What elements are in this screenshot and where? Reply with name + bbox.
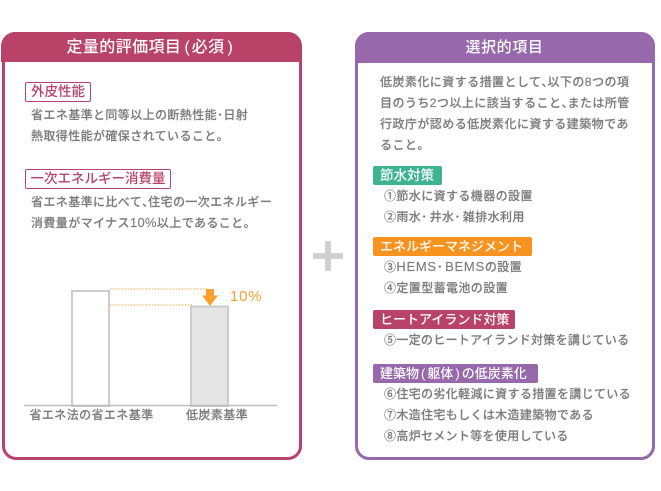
text: intro line 1: 低炭素化に資する措置として、以下の8つの項 [380,75,629,89]
text: primary energy line 2: 消費量がマイナス10%以上であること。 [31,215,256,230]
tag: water saving [373,166,442,185]
text: intro line 2: 目のうち2つ以上に該当すること、または所管 [380,96,630,110]
bar: low carbon standard [191,306,228,406]
item 5: ⑤一定のヒートアイランド対策を講じている [384,333,629,347]
panel frame: optional items [355,32,655,460]
icon: plus sign [313,241,343,271]
item 8: ⑧高炉セメント等を使用している [384,429,569,443]
heading: required items: 定量的評価項目(必須) [66,38,233,56]
label: energy conservation standard: 省エネ法の省エネ基準 [30,408,154,422]
item 3: ③HEMS･BEMSの設置 [384,259,522,274]
heading: required items [1,32,301,62]
item 1: ①節水に資する機器の設置 [384,189,533,203]
tag: heat island: ヒートアイランド対策 [380,312,509,327]
text: envelope performance line 2: 熱取得性能が確保されていること。 [31,129,229,143]
panel: optional items [355,32,655,460]
panel: required items [1,32,302,460]
icon: down arrow [202,289,218,306]
text: primary energy line 1: 省エネ基準に比べて、住宅の一次エネルギー [31,195,272,209]
item 7: ⑦木造住宅もしくは木造建築物である [384,408,594,422]
tag: building frame: 建築物(躯体)の低炭素化 [380,366,527,380]
tag: water saving: 節水対策 [380,168,434,183]
text: intro line 4: ること。 [380,138,430,152]
tag: energy management: エネルギーマネジメント [380,239,523,254]
item 6: ⑥住宅の劣化軽減に資する措置を講じている [384,387,631,401]
text: envelope performance line 1: 省エネ基準と同等以上の断熱性能･日射 [31,108,248,122]
bar chart [24,288,277,407]
bar: energy conservation standard [72,291,109,406]
text: intro line 3: 行政庁が認める低炭素化に資する建築物であ [380,117,629,131]
baseline [24,404,277,406]
label: low carbon standard: 低炭素基準 [186,408,248,422]
item 4: ④定置型蓄電池の設置 [384,281,508,295]
tag: envelope performance [25,82,91,102]
heading: optional items: 選択的項目 [465,38,544,56]
tag: envelope performance: 外皮性能 [31,84,85,99]
panel frame: required items [2,32,302,460]
label: 10%: 10% [230,288,262,305]
tag: primary energy consumption: 一次エネルギー消費量 [30,171,166,186]
tag: primary energy consumption [25,169,171,189]
dotted guide lines [110,289,207,305]
item 2: ②雨水･井水･雑排水利用 [384,210,525,224]
heading: optional items [354,32,654,62]
